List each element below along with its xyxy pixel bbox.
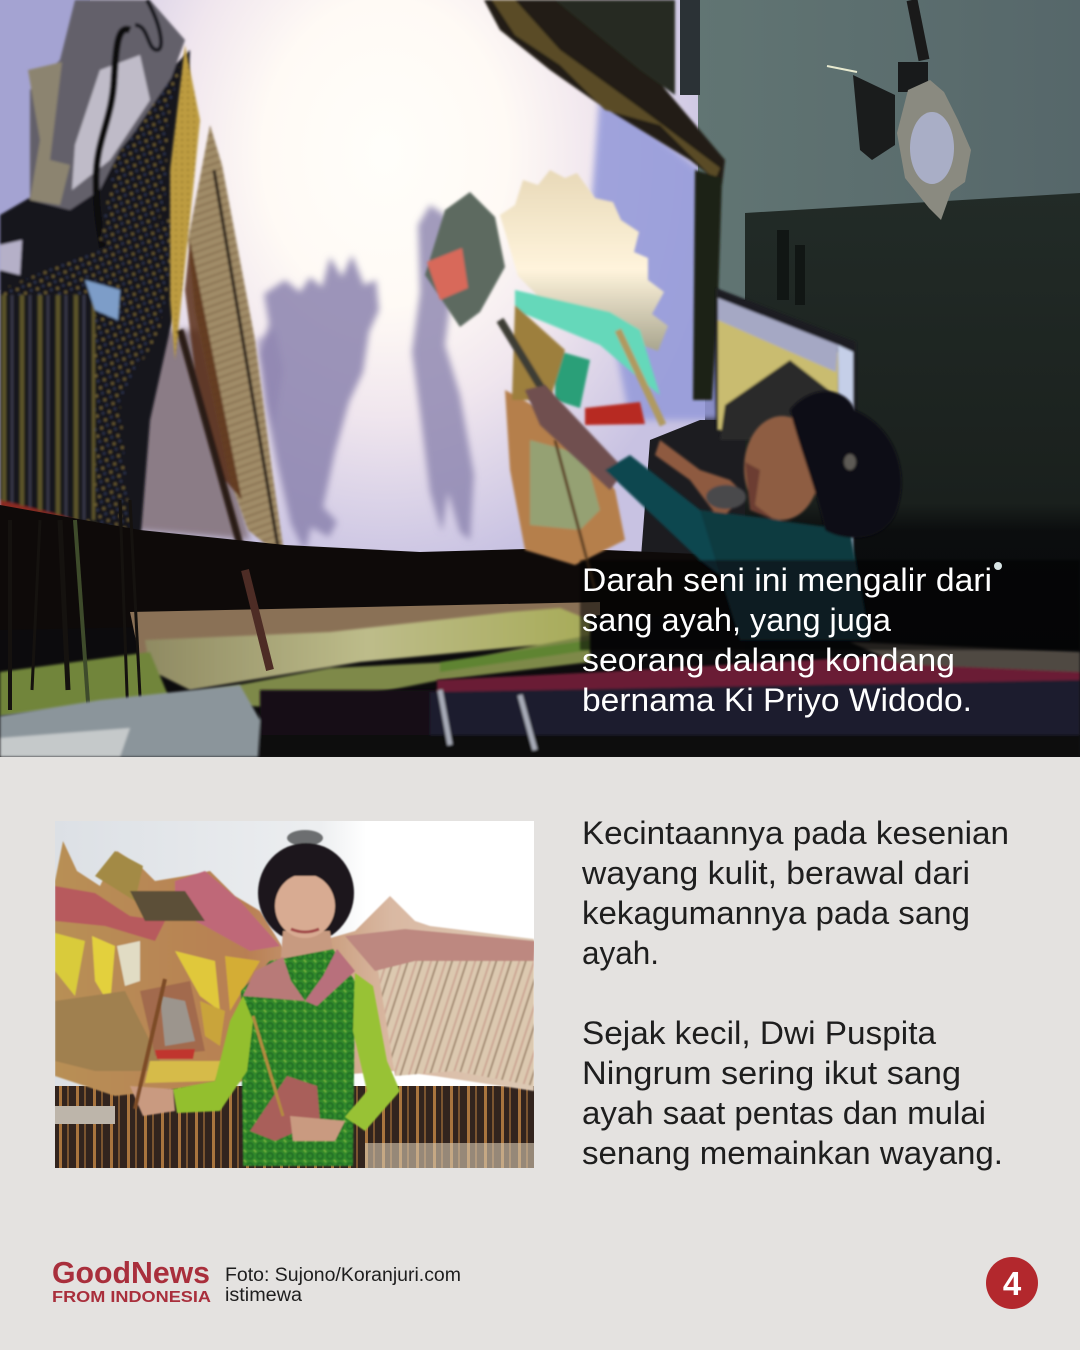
banner behind performer bbox=[716, 288, 856, 560]
hero photo: dalang performing wayang kulit bbox=[0, 0, 1080, 757]
paragraph two: Ningrum sering ikut sang bbox=[582, 1055, 961, 1091]
page number badge: 4 bbox=[1003, 1265, 1022, 1302]
blurred shadow puppets on screen bbox=[255, 205, 474, 552]
lit hero puppet bbox=[425, 170, 668, 590]
caption text on photo: bernama Ki Priyo Widodo. bbox=[582, 682, 972, 718]
page number badge bbox=[986, 1257, 1038, 1309]
wayang puppets rack at left bbox=[0, 0, 190, 545]
cloth and table at bottom bbox=[0, 642, 1080, 757]
GoodNews logo bbox=[52, 1255, 211, 1306]
photo background bbox=[55, 821, 534, 1168]
GoodNews logo: GoodNews bbox=[52, 1255, 210, 1290]
photo credit bbox=[225, 1265, 461, 1306]
paragraph two: senang memainkan wayang. bbox=[582, 1135, 1003, 1171]
ornate screen border bbox=[484, 0, 725, 400]
GoodNews logo: FROM INDONESIA bbox=[52, 1289, 211, 1306]
shadow screen bbox=[0, 0, 720, 560]
stick band bbox=[55, 1086, 534, 1168]
dark valance band bbox=[0, 505, 720, 660]
paragraph two: ayah saat pentas dan mulai bbox=[582, 1095, 986, 1131]
photo credit: Foto: Sujono/Koranjuri.com bbox=[225, 1265, 461, 1286]
caption text on photo: seorang dalang kondang bbox=[582, 642, 955, 678]
caption text on photo bbox=[582, 562, 992, 718]
paragraph one bbox=[581, 815, 1009, 971]
hanging puppet and lamp bbox=[827, 0, 1002, 570]
tall gold puppets bbox=[170, 45, 298, 670]
banana trunk stage bbox=[0, 608, 590, 716]
paragraph one: ayah. bbox=[582, 935, 659, 971]
paragraph one: kekagumannya pada sang bbox=[582, 895, 970, 931]
caption text on photo: sang ayah, yang juga bbox=[582, 602, 891, 638]
photo credit: istimewa bbox=[225, 1285, 302, 1306]
portrait photo: woman in green kebaya with wayang puppets bbox=[55, 821, 534, 1168]
paragraph one: wayang kulit, berawal dari bbox=[581, 855, 970, 891]
dark base of the stage bbox=[0, 0, 1080, 757]
caption text on photo: Darah seni ini mengalir dari bbox=[582, 562, 992, 598]
footer bbox=[52, 1255, 1038, 1309]
puppet mass bbox=[55, 841, 535, 1096]
puppet rods bbox=[10, 500, 270, 735]
woman bbox=[130, 830, 400, 1166]
paragraph two: Sejak kecil, Dwi Puspita bbox=[582, 1015, 936, 1051]
back wall and dark hall bbox=[640, 0, 1080, 757]
paragraph two bbox=[582, 1015, 1003, 1171]
performer with raised arms bbox=[525, 385, 1080, 650]
paragraph one: Kecintaannya pada kesenian bbox=[582, 815, 1009, 851]
body text bbox=[581, 815, 1009, 1171]
